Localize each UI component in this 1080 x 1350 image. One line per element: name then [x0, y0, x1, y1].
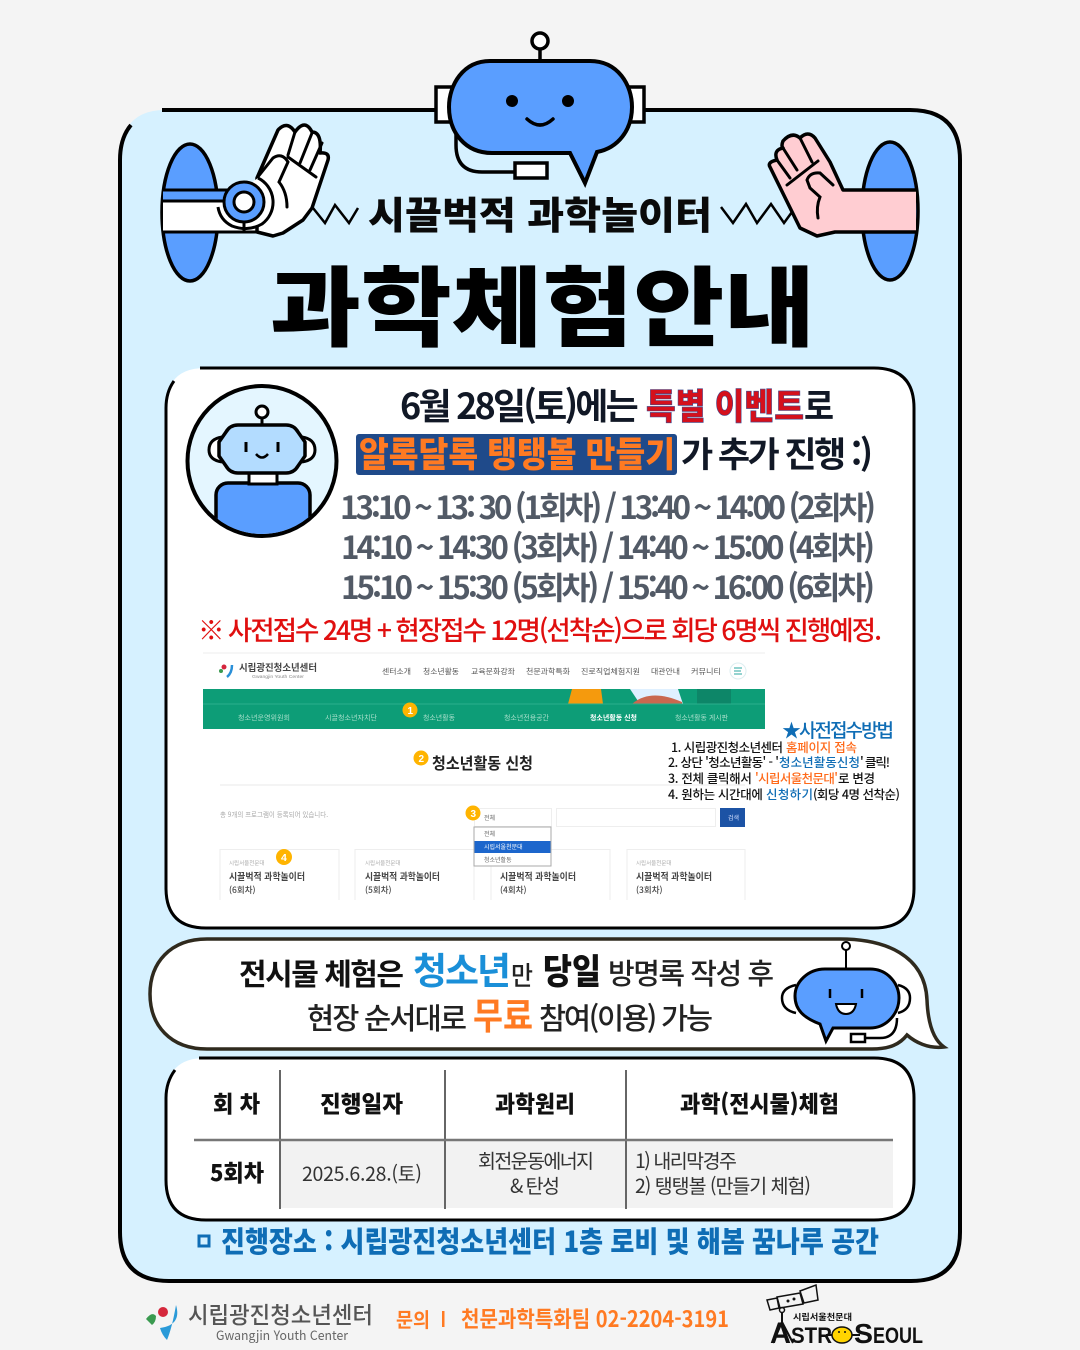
pre-registration steps: 2. 상단 '청소년활동' - ' — [668, 752, 779, 771]
website screenshot: 청소년활동 신청 — [590, 713, 637, 723]
event name suffix: 가 추가 진행 :) — [681, 427, 873, 478]
website screenshot: 센터소개 — [382, 666, 411, 677]
footer: Gwangjin Youth Center logo: Gwangjin Youth Center — [216, 1325, 349, 1344]
decoration: right zigzag — [721, 204, 792, 223]
notice text: 현장 순서대로 — [307, 996, 467, 1038]
icon: robot hand through portal — [162, 125, 328, 281]
website screenshot: 총 9개의 프로그램이 등록되어 있습니다. — [220, 810, 328, 820]
website screenshot: 시끌벅적 과학놀이터 — [365, 869, 440, 883]
footer: AstroSeoul logo: 시립서울천문대 — [793, 1311, 852, 1323]
notice text: 당일 — [543, 944, 601, 995]
table header: 과학(전시물)체험 — [680, 1085, 839, 1119]
table row: session 5: 2) 탱탱볼 (만들기 체험) — [635, 1170, 811, 1199]
pre-registration steps: ★사전접수방법 — [782, 716, 894, 743]
notice text: 참여(이용) 가능 — [539, 996, 713, 1038]
session time schedule: 15:10 ~ 15:30 (5회차) / 15:40 ~ 16:00 (6회차) — [341, 563, 875, 609]
panel: speech bubble notice — [150, 939, 944, 1049]
pre-registration steps: 4. 원하는 시간대에 — [668, 784, 766, 803]
website screenshot: (3회차) — [636, 884, 663, 896]
red capacity notice: ※ 사전접수 24명 + 현장접수 12명(선착순)으로 회당 6명씩 진행예정. — [198, 609, 882, 648]
footer: AstroSeoul logo: STR — [791, 1323, 832, 1348]
notice text — [239, 941, 774, 1040]
website screenshot: 시끌청소년자치단 — [325, 713, 378, 723]
icon: notice robot — [782, 942, 910, 1042]
venue line: 진행장소 : 시립광진청소년센터 1층 로비 및 해봄 꿈나루 공간 — [221, 1219, 879, 1261]
table header: 과학원리 — [495, 1085, 575, 1119]
website screenshot: 청소년활동 — [423, 713, 456, 723]
panel: program table — [166, 1058, 914, 1220]
website screenshot: 시끌벅적 과학놀이터 — [636, 869, 712, 883]
table row: session 5: 2025.6.28.(토) — [302, 1158, 422, 1187]
table header — [213, 1085, 839, 1119]
website screenshot: 청소년운영위원회 — [238, 713, 290, 723]
website screenshot: 청소년활동 — [423, 666, 459, 677]
website screenshot: 시립서울천문대 — [484, 842, 523, 851]
pre-registration steps: 신청하기 — [766, 784, 813, 803]
pre-registration steps: 홈페이지 접속 — [786, 737, 857, 756]
website screenshot: 커뮤니티 — [691, 666, 721, 677]
website screenshot: 1 — [408, 706, 414, 717]
panel: event information card — [166, 368, 914, 928]
website screenshot: 시립광진청소년센터 — [239, 660, 317, 674]
website screenshot: 4 — [281, 852, 287, 864]
session time schedule: 14:10 ~ 14:30 (3회차) / 14:40 ~ 15:00 (4회차) — [341, 523, 875, 569]
session time schedule: 13:10 ~ 13: 30 (1회차) / 13:40 ~ 14:00 (2회차) — [340, 483, 876, 529]
website screenshot: 천문과학특화 — [526, 666, 570, 677]
notice text: 만 — [511, 956, 533, 993]
website screenshot: 검색 — [728, 813, 739, 822]
panel: main light blue card — [120, 110, 960, 1281]
event date heading — [400, 378, 834, 430]
website screenshot: 교육문화강좌 — [471, 666, 515, 677]
table row: session 5: 5회차 — [210, 1154, 264, 1188]
website screenshot: 시립서울천문대 — [636, 859, 671, 867]
website screenshot: 3 — [470, 809, 476, 820]
website screenshot — [203, 653, 765, 920]
icon: speech bubble robot mascot — [436, 33, 644, 183]
table row: session 5: 1) 내리막경주 — [635, 1145, 737, 1174]
website screenshot: 전체 — [484, 829, 495, 838]
website screenshot: 청소년활동 신청 — [432, 750, 533, 774]
decoration: left zigzag — [313, 205, 358, 223]
icon: robot in circle — [188, 386, 336, 553]
footer: Gwangjin Youth Center logo — [146, 1296, 373, 1344]
pre-registration steps: (회당 4명 선착순) — [813, 784, 900, 803]
highlighted event name: 알록달록 탱탱볼 만들기 — [359, 427, 675, 478]
event date heading: 6월 28일(토)에는 — [400, 378, 646, 430]
title: 과학체험안내 — [270, 239, 815, 365]
website screenshot: 대관안내 — [651, 666, 680, 677]
pre-registration steps: 3. 전체 클릭해서 — [668, 768, 755, 787]
table row: session 5: 회전운동에너지 — [478, 1145, 594, 1174]
website screenshot: 시립서울천문대 — [365, 859, 400, 867]
website screenshot: (5회차) — [365, 884, 392, 896]
table header: 진행일자 — [320, 1085, 403, 1119]
pre-registration steps: 청소년활동신청 — [779, 752, 860, 771]
website screenshot: 진로직업체험지원 — [581, 666, 640, 677]
footer: contact line: 천문과학특화팀 02-2204-3191 — [461, 1302, 729, 1334]
pre-registration steps: '시립서울천문대' — [755, 768, 838, 787]
table header: 회 차 — [213, 1085, 260, 1119]
website screenshot: 2 — [418, 754, 424, 765]
website screenshot: (4회차) — [500, 884, 527, 896]
notice text: 전시물 체험은 — [239, 950, 404, 994]
notice text: 청소년 — [413, 941, 511, 995]
website screenshot: 시끌벅적 과학놀이터 — [500, 869, 576, 883]
pre-registration steps: 1. 시립광진청소년센터 — [671, 737, 786, 756]
footer: Gwangjin Youth Center logo: 시립광진청소년센터 — [188, 1296, 373, 1330]
table row: session 5: & 탄성 — [510, 1170, 560, 1199]
website screenshot: 청소년전용공간 — [504, 713, 550, 723]
event date heading: 로 — [804, 378, 834, 430]
footer: AstroSeoul logo: A — [770, 1317, 791, 1350]
table row: session 5 — [210, 1145, 811, 1199]
footer: contact line: 문의 — [396, 1304, 430, 1333]
event date heading: 특별 이벤트 — [646, 378, 804, 430]
icon: human hand through portal — [769, 134, 918, 280]
pre-registration steps: ' 클릭! — [860, 752, 890, 771]
pre-registration steps: 로 변경 — [838, 768, 875, 787]
notice text: 무료 — [473, 986, 533, 1040]
website screenshot: 청소년활동 게시판 — [675, 713, 729, 723]
website screenshot: 시끌벅적 과학놀이터 — [229, 869, 305, 883]
website screenshot: (6회차) — [229, 884, 256, 896]
footer: AstroSeoul logo: EOUL — [873, 1323, 923, 1348]
infographic canvas — [118, 31, 962, 1344]
website screenshot: 전체 — [484, 813, 495, 822]
footer: AstroSeoul logo: S — [854, 1318, 873, 1349]
session time schedule — [340, 483, 876, 609]
notice text: 방명록 작성 후 — [608, 951, 774, 993]
website screenshot: 시립서울천문대 — [229, 859, 264, 867]
website screenshot: Gwangjin Youth Center — [252, 674, 305, 679]
pre-registration steps — [668, 716, 900, 803]
footer: AstroSeoul logo — [767, 1285, 923, 1350]
website screenshot: 청소년활동 — [484, 855, 512, 864]
subtitle: 시끌벅적 과학놀이터 — [368, 185, 712, 240]
